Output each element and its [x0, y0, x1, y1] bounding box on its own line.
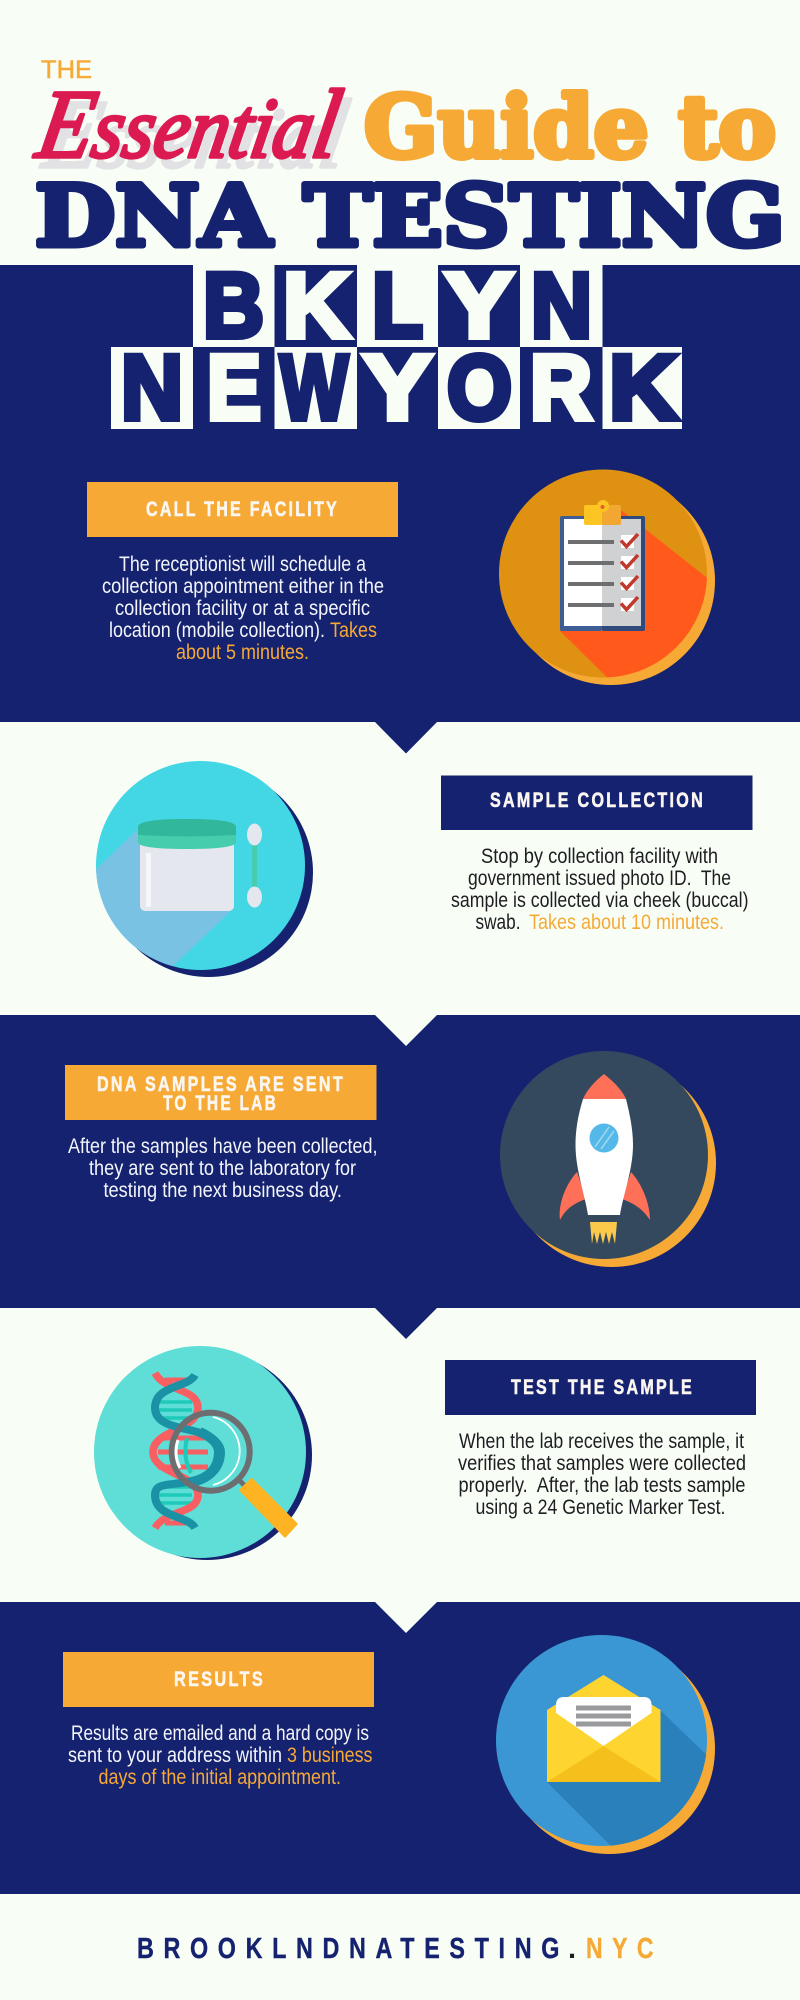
- text block: call the facility: [102, 552, 384, 664]
- title words: DNA Testing: DNA TESTING: [35, 166, 785, 266]
- text block: test the sample: When the lab receives the sample, it: [459, 1429, 744, 1453]
- footer: website address: .: [568, 1933, 576, 1965]
- heading box: results: [63, 1652, 374, 1707]
- panel: results: [63, 1635, 720, 1860]
- block letters: BKLYN NEWYORK: E: [207, 337, 261, 439]
- panel: sample collection: [85, 761, 752, 985]
- arrow: step 3 notch: [375, 1015, 437, 1046]
- heading box: results: RESULTS: [174, 1668, 265, 1691]
- text block: sample collection: swab.: [476, 910, 520, 934]
- text block: samples sent: [68, 1134, 378, 1202]
- heading box: call the facility: [87, 482, 398, 537]
- title word: Essential shadow: Essential: [35, 81, 356, 189]
- heading box: call the facility: CALL THE FACILITY: [146, 498, 339, 521]
- text block: call the facility: collection appointment either in the: [102, 574, 384, 598]
- text block: test the sample: verifies that samples were collected: [458, 1451, 746, 1475]
- block letters: BKLYN NEWYORK: K: [609, 337, 678, 439]
- text block: call the facility: The receptionist will schedule a: [119, 552, 366, 576]
- title word: The: THE: [41, 56, 92, 84]
- block letters: BKLYN NEWYORK: Y: [363, 337, 432, 439]
- band: step 5 navy background: [0, 1602, 800, 1894]
- block letters: BKLYN NEWYORK: Y: [445, 255, 513, 357]
- text block: call the facility: collection facility or at a specific: [115, 596, 370, 620]
- text block: results: Results are emailed and a hard copy is: [71, 1721, 369, 1745]
- block letters: BKLYN NEWYORK: O: [447, 337, 512, 439]
- title: [28, 56, 785, 266]
- heading box: sample collection: [441, 776, 752, 830]
- band: header and step 1 navy background: [0, 265, 800, 722]
- text block: samples sent: After the samples have been collected,: [68, 1134, 378, 1158]
- text block: test the sample: using a 24 Genetic Marker Test.: [476, 1495, 726, 1519]
- icon: DNA helix and magnifier: [94, 1346, 312, 1560]
- title words: Guide to: Guide to: [364, 78, 776, 178]
- text block: call the facility: Takes: [330, 618, 377, 642]
- text block: call the facility: location (mobile collection).: [109, 618, 325, 642]
- text block: sample collection: Takes about 10 minutes.: [529, 910, 724, 934]
- heading box: DNA samples are sent to the lab: DNA SAMPLES ARE SENT: [97, 1073, 345, 1096]
- block letters: BKLYN NEWYORK: N: [121, 337, 183, 439]
- title word: Essential: Essential: [28, 71, 349, 179]
- heading box: test the sample: [445, 1360, 756, 1415]
- band: step 3 navy background: [0, 1015, 800, 1308]
- block letters: BKLYN NEWYORK: K: [283, 255, 350, 357]
- heading box: sample collection: SAMPLE COLLECTION: [490, 789, 705, 812]
- arrow: step 3 pointer: [375, 1308, 437, 1339]
- heading box: DNA samples are sent to the lab: [65, 1065, 376, 1120]
- footer: website address: BROOKLNDNATESTING: [137, 1933, 569, 1965]
- arrow: step 1 pointer: [375, 722, 437, 754]
- footer: website address: NYC: [586, 1933, 663, 1965]
- text block: sample collection: Stop by collection facility with: [481, 844, 718, 868]
- icon: sample jar and swab: [85, 761, 313, 985]
- heading box: test the sample: TEST THE SAMPLE: [511, 1376, 694, 1399]
- block letters: BKLYN NEWYORK: R: [530, 337, 592, 439]
- text block: samples sent: testing the next business day.: [104, 1178, 342, 1202]
- text block: sample collection: [451, 844, 748, 934]
- block letters: BKLYN NEWYORK: W: [280, 337, 348, 439]
- text block: results: [68, 1721, 372, 1789]
- panel: test the sample: [94, 1346, 756, 1560]
- text block: test the sample: [458, 1429, 746, 1519]
- arrow: step 5 notch: [375, 1602, 437, 1633]
- text block: samples sent: they are sent to the laboratory for: [89, 1156, 356, 1180]
- text block: call the facility: about 5 minutes.: [176, 640, 309, 664]
- text block: sample collection: government issued photo ID. The: [468, 866, 731, 890]
- heading box: DNA samples are sent to the lab: TO THE LAB: [163, 1092, 278, 1115]
- icon: rocket: [500, 1051, 716, 1267]
- block letters: BKLYN NEWYORK: N: [531, 255, 592, 357]
- icon: clipboard checklist: [499, 470, 720, 692]
- block letters: BKLYN NEWYORK: L: [372, 255, 423, 357]
- text block: results: days of the initial appointment.: [98, 1765, 341, 1789]
- icon: open envelope: [496, 1635, 720, 1860]
- block letters: BKLYN NEWYORK: [111, 255, 682, 439]
- panel: call the facility: [87, 470, 720, 692]
- text block: results: 3 business: [287, 1743, 372, 1767]
- text block: results: sent to your address within: [68, 1743, 282, 1767]
- panel: samples sent to the lab: [65, 1051, 716, 1267]
- block letters: BKLYN NEWYORK: B: [203, 255, 264, 357]
- text block: test the sample: properly. After, the lab tests sample: [458, 1473, 746, 1497]
